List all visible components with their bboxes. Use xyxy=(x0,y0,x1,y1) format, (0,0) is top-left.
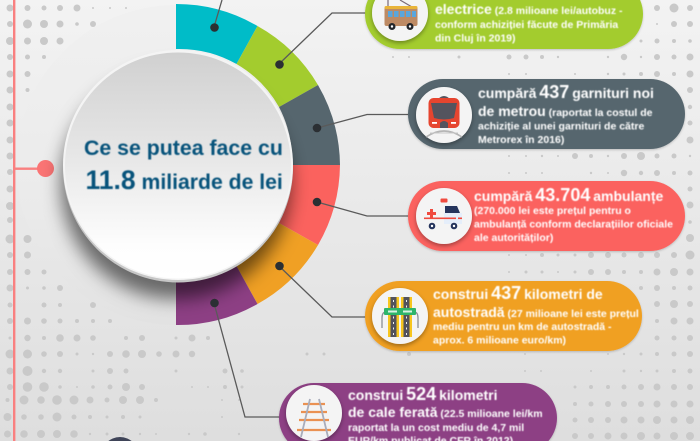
segment: green xyxy=(236,26,318,107)
text: motorway: mediu pentru un km de autostradă - xyxy=(433,321,612,333)
text: ambulances: cumpără 43.704 ambulanțe xyxy=(474,185,663,205)
dark circle cut off at the bottom xyxy=(101,437,139,441)
text: motorway: aprox. 6 milioane euro/km) xyxy=(433,334,566,346)
center disc xyxy=(63,50,293,282)
icon: railway xyxy=(286,385,342,441)
text: trolleybuses xyxy=(435,1,623,44)
text: trolleybuses: electrice (2.8 milioane lei/autobuz - xyxy=(435,1,623,17)
text: trolleybuses: conform achiziției făcute de Primăria xyxy=(435,19,618,31)
text: railway xyxy=(348,384,543,441)
text: trolleybuses: din Cluj în 2019) xyxy=(435,32,516,44)
segment: slate xyxy=(279,85,340,165)
icon: motorway xyxy=(372,288,428,344)
segment: cyan xyxy=(176,4,258,64)
text: metro: de metrou (raportat la costul de xyxy=(478,103,653,119)
center disc shadow xyxy=(61,69,291,299)
pale backing half-disc xyxy=(16,5,176,325)
pill: ambulances xyxy=(408,181,685,251)
text: ambulances: ale autorităților) xyxy=(474,232,553,244)
text: ambulances: ambulanță conform declarațiilor oficiale xyxy=(474,218,673,230)
text: ambulances xyxy=(474,185,673,244)
text: motorway: construi 437 kilometri de xyxy=(433,283,603,303)
text: metro xyxy=(478,82,654,146)
segment: purple xyxy=(176,266,258,325)
pill: trolleybuses xyxy=(365,0,643,49)
segmented ring xyxy=(176,4,340,325)
text: metro: cumpără 437 garnituri noi xyxy=(478,82,654,102)
heading xyxy=(84,136,283,195)
text: motorway: autostradă (27 milioane lei este prețul xyxy=(433,304,639,320)
text: railway: construi 524 kilometri xyxy=(348,384,497,404)
pill: railway xyxy=(279,383,557,441)
text: motorway xyxy=(433,283,639,346)
leader dots xyxy=(210,23,321,307)
text: railway: de cale ferată (22.5 milioane lei/km xyxy=(348,404,543,420)
icon: ambulance xyxy=(416,188,472,244)
icon: metro train xyxy=(416,87,472,143)
text: metro: achiziție al unei garnituri de către xyxy=(478,120,644,132)
pill: motorway xyxy=(365,281,642,351)
segment: red xyxy=(279,165,340,245)
text: ambulances: (270.000 lei este prețul pentru o xyxy=(474,205,631,217)
leader lines xyxy=(214,0,410,417)
segment: orange xyxy=(236,223,318,304)
text: railway: raportat la un cost mediu de 4,7 mil xyxy=(348,422,524,434)
text: metro: Metrorex în 2016) xyxy=(478,134,564,146)
heading: Ce se putea face cu xyxy=(84,136,283,160)
heading: 11.8 miliarde de lei xyxy=(86,165,283,195)
pill: metro xyxy=(408,79,685,149)
icon: trolleybus xyxy=(372,0,428,41)
timeline rule with marker xyxy=(13,0,54,441)
